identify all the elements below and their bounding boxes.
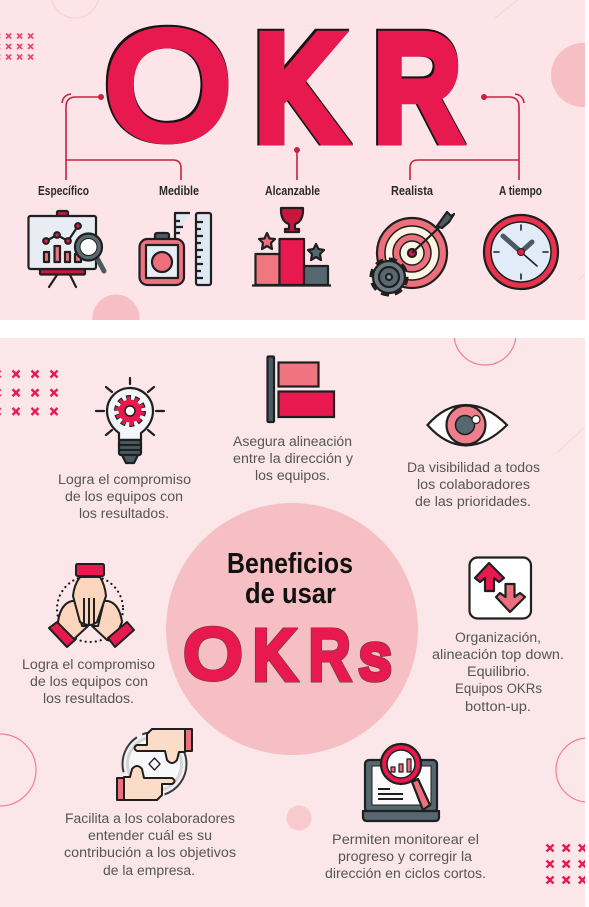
heading: OKRs: R (309, 616, 350, 694)
text: Organización: botton-up. (465, 699, 531, 714)
text: Asegura alineación: Asegura alineación (233, 434, 352, 449)
label: Medible: Medible (159, 184, 199, 198)
icon: eye (428, 405, 507, 446)
label: Alcanzable: Alcanzable (265, 184, 320, 198)
heading: Beneficios de usar: de usar (245, 578, 336, 610)
connector: right branches (410, 94, 524, 180)
icon: presentation board with magnifier (28, 211, 104, 287)
label: Específico: Específico (38, 184, 89, 198)
text: Permiten monitorear (326, 834, 485, 878)
text: Logra el compromiso (2): Logra el compromiso (22, 657, 155, 672)
text: Permiten monitorear: Permiten monitorear el (332, 832, 479, 847)
connector: center (295, 148, 299, 180)
icon: podium with trophy and stars (252, 208, 331, 286)
heading: Beneficios de usar: Beneficios (227, 548, 353, 580)
text: Organización: Equilibrio. (467, 664, 530, 679)
heading: OKRs: K (253, 617, 295, 695)
text: Logra el compromiso (1): Logra el compromiso (58, 472, 191, 487)
heading: OKRs (184, 626, 392, 683)
icon: clock (484, 215, 558, 289)
heading: OKRs: s (360, 621, 390, 693)
text: Asegura alineación (233, 434, 353, 483)
text: Facilita a los colaboradores (64, 811, 236, 878)
icon: light bulb with gear (96, 378, 164, 463)
text: Organización: Equipos OKRs (455, 681, 542, 696)
text: Logra el compromiso (2) (23, 659, 154, 703)
text: Organización (432, 630, 564, 714)
central circle (166, 503, 418, 755)
icon: laptop with magnifier (363, 744, 439, 821)
title: OKR (106, 24, 467, 146)
text: Logra el compromiso (2): de los equipos con (30, 674, 148, 689)
text: Facilita a los colaboradores: de la empresa. (103, 863, 195, 878)
text: Da visibilidad a todos: Da visibilidad a todos (407, 460, 540, 475)
heading: Beneficios de usar (228, 552, 352, 604)
icon: up and down arrows (470, 558, 531, 618)
text: Da visibilidad a todos: los colaboradores (417, 477, 530, 492)
text: Asegura alineación: entre la dirección y (233, 451, 353, 466)
icon: team hands (49, 564, 134, 647)
title: OKR: O (105, 1, 230, 170)
text: Da visibilidad a todos (407, 460, 540, 509)
text: Asegura alineación: los equipos. (255, 468, 330, 483)
text: Facilita a los colaboradores: entender cuál es su (88, 828, 212, 843)
icon: framing hands (117, 729, 192, 800)
panel: benefits (0, 303, 589, 907)
title: OKR: K (255, 7, 340, 168)
text: Da visibilidad a todos: de las prioridades. (415, 494, 531, 509)
label: Realista: Realista (391, 184, 434, 198)
text: Facilita a los colaboradores: contribución a los objetivos (64, 845, 236, 860)
icon: target with arrow and gear (372, 212, 454, 294)
panel: OKR acronym (0, 0, 589, 342)
title: OKR: R (374, 8, 460, 169)
icon: alignment bars (268, 356, 334, 422)
text: Permiten monitorear: progreso y corregir la (338, 849, 473, 864)
text: Logra el compromiso (1) (59, 474, 190, 518)
text: Facilita a los colaboradores: Facilita a los colaboradores (65, 811, 235, 826)
text: Organización: Organización, (455, 630, 541, 645)
text: Logra el compromiso (1): de los equipos con (65, 489, 183, 504)
label: A tiempo: A tiempo (499, 184, 542, 198)
connector: left branches (62, 94, 181, 180)
heading: OKRs: O (184, 616, 242, 694)
text: Logra el compromiso (2): los resultados. (43, 691, 134, 706)
text: Logra el compromiso (1): los resultados. (79, 506, 169, 521)
icon: measuring tape and ruler (140, 213, 211, 285)
text: Permiten monitorear: dirección en ciclos cortos. (325, 866, 486, 881)
text: Organización: alineación top down. (432, 647, 564, 662)
